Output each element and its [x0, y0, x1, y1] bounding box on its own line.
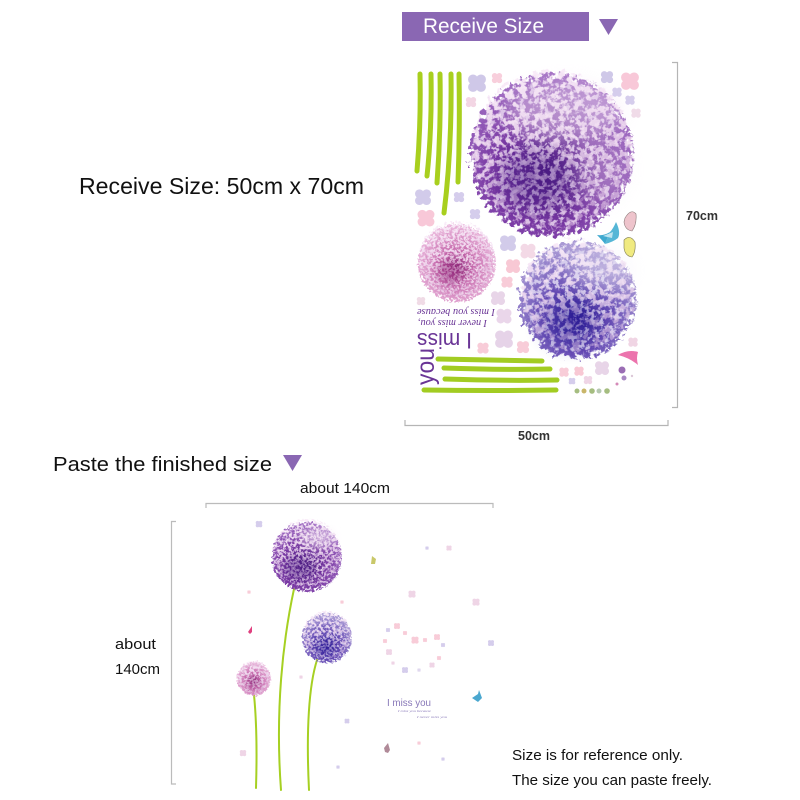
butterfly: small yellow [371, 556, 376, 564]
text: I never miss you: I never miss you [416, 715, 447, 719]
green stem strips, vertical [417, 74, 459, 213]
green stem strips, horizontal [424, 359, 557, 390]
text: receive size dimensions: Receive Size: 50cm x 70cm [79, 173, 364, 199]
rotated text: I never miss you: I never miss you, [418, 317, 488, 328]
label: about 140cm height: about [115, 637, 156, 653]
butterfly: small blue [472, 690, 482, 702]
butterfly: yellow [624, 237, 635, 257]
butterfly: small red [248, 626, 252, 634]
green dot row [574, 388, 610, 394]
rotated text: you: you [412, 348, 440, 385]
label: about 140cm width: about 140cm [300, 481, 390, 497]
blue-violet flower head [519, 239, 637, 359]
rotated text: I miss you because: I miss you because [417, 306, 496, 317]
butterfly: pink [624, 212, 636, 231]
bracket: finished height [172, 522, 176, 784]
heading bar: Receive Size: Receive Size [423, 15, 544, 38]
bracket: 50cm width [405, 420, 668, 426]
rotated text: I miss: I miss [417, 328, 472, 353]
dandelion stems [254, 589, 317, 790]
scattered florets [240, 521, 494, 769]
label: about 140cm height [115, 637, 160, 678]
pink flower head [418, 221, 496, 302]
text: I miss you because: I miss you because [397, 709, 432, 713]
butterfly: small brown [384, 743, 390, 753]
panel: finished wall decoration [237, 519, 494, 790]
bracket: 70cm height [672, 62, 678, 408]
small hydrangea florets [415, 71, 641, 384]
butterfly: blue [597, 222, 619, 244]
icon: heading triangle [599, 19, 618, 35]
label: 70cm: 70cm [686, 209, 718, 223]
label: 50cm: 50cm [518, 429, 550, 443]
dandelion head: pink [237, 661, 271, 696]
pink smear [618, 351, 638, 365]
dandelion head: blue [302, 611, 352, 663]
tiny purple flowers [616, 366, 633, 386]
bracket: finished width [206, 504, 493, 508]
heading: paste the finished size: Paste the finished size [53, 454, 272, 476]
label: about 140cm height: 140cm [115, 662, 160, 678]
note: size for reference [512, 748, 712, 789]
text: I miss you: I miss you [387, 698, 431, 709]
dandelion head: purple [272, 519, 342, 592]
note: size for reference: The size you can paste freely. [512, 773, 712, 789]
icon: paste heading triangle [283, 455, 302, 471]
panel: sticker sheet [412, 70, 641, 394]
heading bar: Receive Size [402, 12, 589, 41]
big purple flower head [470, 70, 634, 237]
note: size for reference: Size is for reference only. [512, 748, 683, 764]
